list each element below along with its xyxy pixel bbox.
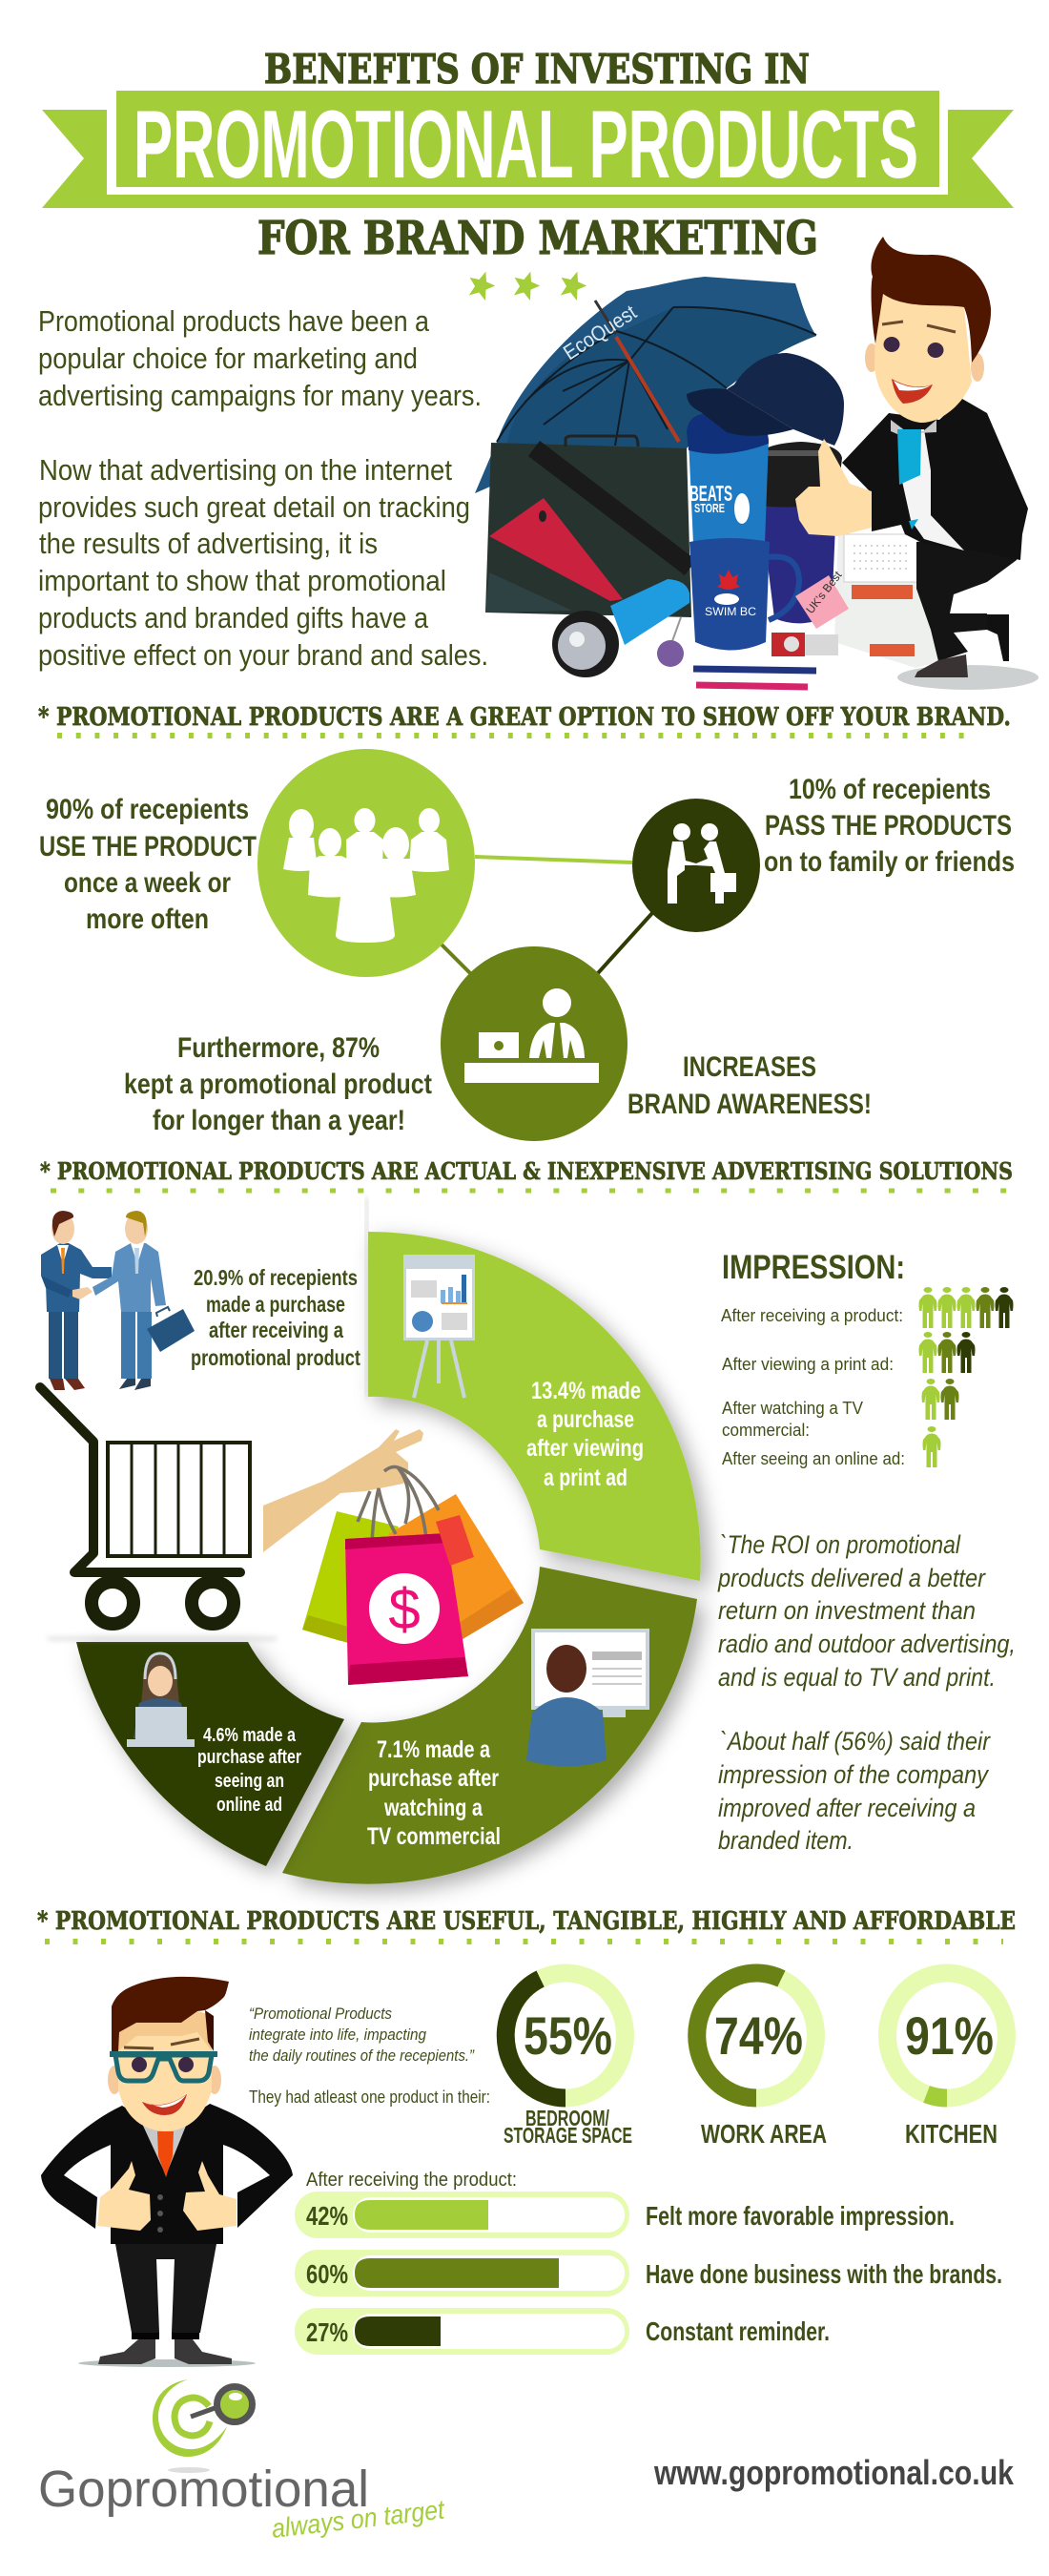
logo wordmark: Gopromotional [38, 2461, 369, 2518]
text: 4.6%: 4.6% made a [203, 1725, 297, 1746]
quote: about half: impression of the company [718, 1760, 989, 1789]
impression labels [721, 1306, 905, 1468]
text: kept a promotional product: for longer than a year! [153, 1105, 405, 1136]
text: kept a promotional product [124, 1032, 432, 1136]
bag [485, 436, 691, 617]
text: 7.1%: purchase after [368, 1765, 499, 1792]
title line: benefits of investing in: BENEFITS OF INVESTING IN [264, 46, 810, 93]
impression labels: commercial: [722, 1421, 810, 1440]
cap [687, 353, 844, 446]
text: 20.9%: promotional product [191, 1345, 360, 1370]
circle: passing products on [632, 799, 760, 932]
icon: monitor and viewer [526, 1629, 649, 1767]
quote text: They had atleast one product in their: [249, 2088, 490, 2107]
calendar [834, 534, 954, 668]
quote: roi: products delivered a better [717, 1564, 986, 1592]
text: use the product: once a week or [64, 867, 231, 899]
text: 7.1%: 7.1% made a [377, 1736, 491, 1763]
sticky note: UK's Best [803, 568, 845, 616]
text: increases brand awareness [627, 1051, 872, 1120]
text: 4.6% [197, 1725, 301, 1816]
text: 7.1% [367, 1736, 501, 1850]
pictogram rows [919, 1287, 1013, 1467]
segment: 4.6% online ad [76, 1642, 344, 1866]
blue bottle: BEATS [689, 481, 732, 506]
segment: 13.4% print ad [368, 1232, 701, 1581]
impression labels: After watching a TV [722, 1399, 863, 1418]
text: 4.6%: seeing an [215, 1771, 284, 1792]
text: 13.4% [526, 1378, 644, 1491]
impression labels: After viewing a print ad: [722, 1355, 894, 1374]
quote: roi: radio and outdoor advertising, [718, 1630, 1016, 1658]
impression heading: IMPRESSION: [722, 1249, 905, 1286]
text: increases brand awareness: BRAND AWARENESS! [627, 1089, 872, 1120]
text: 7.1%: TV commercial [367, 1823, 501, 1850]
mug [689, 538, 799, 651]
donut chart: 74% work area: 74% [714, 2005, 803, 2066]
usb stick [771, 633, 838, 656]
text: use the product [39, 794, 257, 935]
donut chart: 91% kitchen [887, 1973, 1007, 2149]
text: increases brand awareness: INCREASES [683, 1051, 816, 1083]
impression labels: After receiving a product: [721, 1306, 903, 1325]
intro text: the results of advertising, it is [39, 527, 378, 560]
text: use the product: more often [86, 904, 209, 935]
icon: shopping bags [302, 1467, 524, 1685]
intro text: important to show that promotional [38, 564, 446, 597]
text: 20.9%: after receiving a [209, 1318, 343, 1342]
text: use the product: USE THE PRODUCT [39, 831, 257, 862]
progress bar: 42%: 42% [306, 2201, 348, 2231]
text: use the product: 90% of recepients [46, 794, 249, 825]
donut chart: 91% kitchen: 91% [905, 2005, 994, 2066]
intro text: popular choice for marketing and [38, 342, 418, 375]
text: 20.9%: 20.9% of recepients [194, 1265, 358, 1290]
text: 13.4%: after viewing [526, 1435, 644, 1462]
title [42, 46, 1014, 265]
text: pass the products: 10% of recepients [789, 774, 991, 805]
intro text: advertising campaigns for many years. [38, 379, 482, 412]
text: 13.4%: 13.4% made [531, 1378, 641, 1404]
quote text [249, 2005, 490, 2107]
quote: roi: `The ROI on promotional [720, 1530, 961, 1559]
text: 20.9%: made a purchase [206, 1292, 345, 1317]
progress bar: 42%: Felt more favorable impression. [646, 2201, 955, 2231]
progress bar: 42% [295, 2192, 955, 2238]
text: 13.4%: a print ad [544, 1465, 627, 1491]
promotional products illustration [475, 237, 1039, 690]
connector lines [442, 857, 652, 973]
text: 7.1%: watching a [383, 1795, 483, 1821]
progress bar: 27%: Constant reminder. [646, 2316, 830, 2346]
blue bottle [687, 413, 769, 544]
quote: roi [717, 1530, 1016, 1692]
logo mark: target [153, 2379, 252, 2473]
intro text: provides such great detail on tracking [38, 490, 470, 524]
segment: 7.1% tv commercial [282, 1567, 697, 1884]
icon: shopping bags: $ [388, 1577, 421, 1641]
flashlight [552, 579, 689, 677]
text: 13.4%: a purchase [537, 1406, 634, 1433]
pie chart [76, 1232, 701, 1884]
stars [464, 267, 590, 302]
intro text: Now that advertising on the internet [39, 453, 452, 487]
quote text: “Promotional Products [249, 2005, 392, 2023]
progress bar: 60% [295, 2250, 1002, 2296]
intro text: Promotional products have been a [38, 304, 430, 338]
quote text: integrate into life, impacting [249, 2025, 426, 2044]
circle: brand awareness desk [441, 946, 627, 1141]
text: 20.9% [191, 1265, 360, 1370]
character: man with thumbs up [795, 237, 1039, 690]
icon: shopping cart [40, 1387, 250, 1624]
progress bar: 27%: 27% [306, 2317, 348, 2347]
text: pass the products [764, 774, 1015, 878]
donut chart: 55% bedroom: 55% [524, 2005, 612, 2066]
donut chart: 55% bedroom: BEDROOM/ [525, 2106, 609, 2130]
pens [693, 669, 816, 687]
quote: roi: and is equal to TV and print. [718, 1663, 996, 1692]
intro text: products and branded gifts have a [38, 601, 429, 634]
mug: SWIM BC [705, 605, 756, 618]
quote: about half: branded item. [718, 1826, 854, 1855]
icon: woman with headset [127, 1653, 195, 1747]
text: 4.6%: online ad [216, 1795, 282, 1816]
title line: for brand marketing: FOR BRAND MARKETING [257, 212, 818, 265]
quote: about half: `About half (56%) said their [720, 1727, 991, 1755]
text: 4.6%: purchase after [197, 1747, 301, 1768]
donut chart: 74% work area [696, 1973, 827, 2149]
panel edge shadows [48, 1197, 368, 1640]
character: man with glasses [41, 1977, 293, 2367]
text: kept a promotional product: Furthermore, 87% [177, 1032, 380, 1064]
text: kept a promotional product: kept a promotional product [124, 1069, 432, 1100]
quote text: the daily routines of the recepients.” [249, 2046, 475, 2065]
quote: about half [718, 1727, 991, 1855]
icon: hand [263, 1429, 423, 1552]
purple travel mug [756, 442, 842, 623]
bars heading: After receiving the product: [306, 2170, 517, 2191]
businessmen shaking hands [41, 1211, 195, 1390]
umbrella [475, 277, 816, 493]
icon: easel with charts [403, 1255, 475, 1398]
progress bar: 27% [295, 2308, 830, 2355]
sticky note [795, 568, 849, 629]
intro text: positive effect on your brand and sales. [38, 638, 488, 672]
blue bottle: STORE [694, 501, 725, 515]
quote: about half: improved after receiving a [718, 1794, 976, 1822]
donut chart: 91% kitchen: KITCHEN [905, 2119, 998, 2149]
logo [38, 2379, 447, 2544]
progress bar: 60%: 60% [306, 2259, 348, 2289]
quote: roi: return on investment than [718, 1596, 976, 1625]
circle: people using the product [257, 749, 475, 977]
donut chart: 74% work area: WORK AREA [701, 2119, 827, 2149]
impression labels: After seeing an online ad: [722, 1449, 905, 1468]
intro text [38, 304, 488, 672]
logo tagline: always on target [270, 2494, 447, 2544]
donut chart: 55% bedroom [504, 1973, 632, 2148]
donut chart: 55% bedroom: STORAGE SPACE [504, 2123, 632, 2148]
umbrella: EcoQuest [559, 300, 641, 364]
